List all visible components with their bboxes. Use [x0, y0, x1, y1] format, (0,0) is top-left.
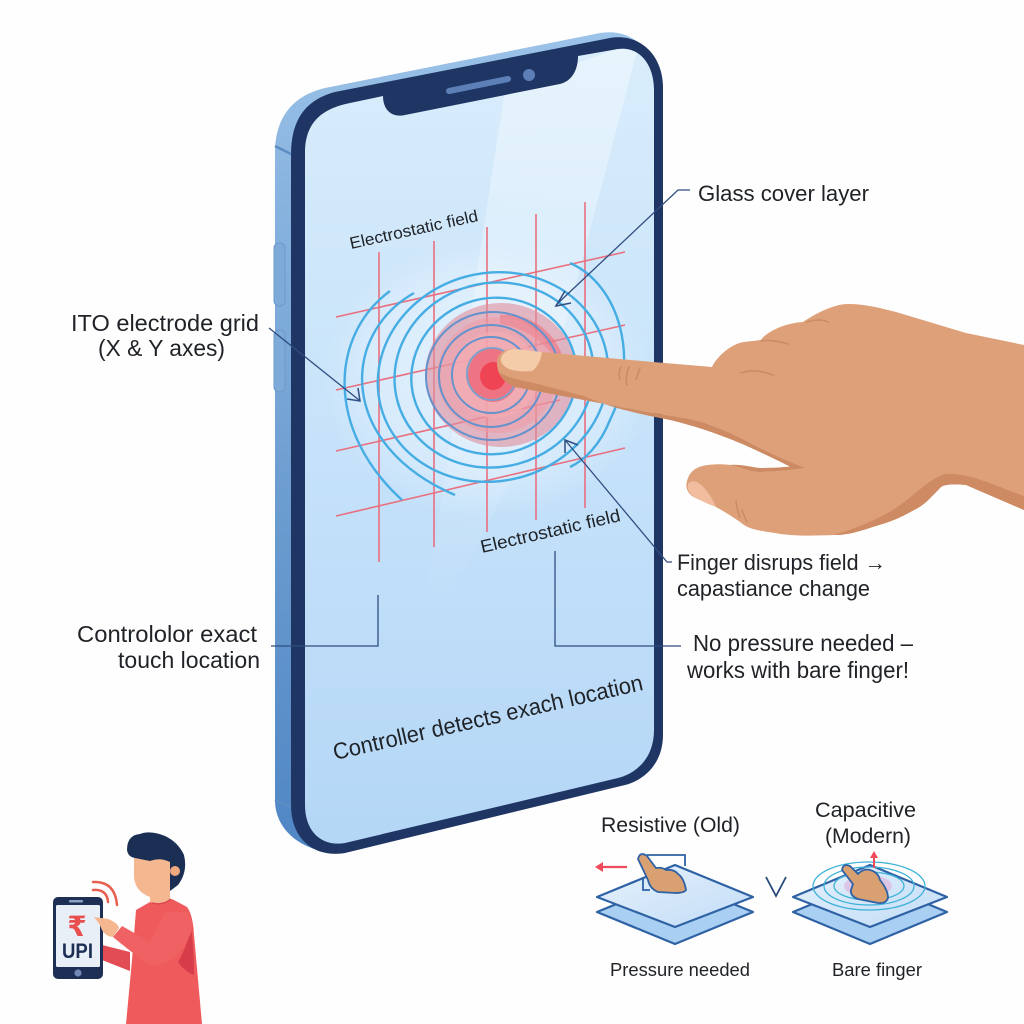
phone — [274, 32, 663, 860]
thumb crotch shadow — [730, 465, 806, 472]
comparison: resistive — [595, 814, 753, 980]
callout: finger disrupts field — [565, 440, 886, 601]
shirt shade — [178, 925, 194, 975]
callout: finger disrupts field: Finger disrups field → — [677, 550, 886, 575]
touch hotspot — [425, 303, 577, 447]
small phone — [53, 897, 103, 979]
collar — [152, 899, 171, 904]
resistive frame — [643, 855, 685, 890]
capacitive rings — [813, 862, 925, 910]
front arm — [113, 912, 192, 966]
caption: pressure needed: Pressure needed — [610, 959, 750, 980]
small phone: UPI — [62, 940, 93, 963]
neck and face — [134, 858, 170, 903]
callout: glass cover layer: Glass cover layer — [698, 181, 869, 206]
electrostatic field rings — [345, 247, 632, 507]
caption: bare finger: Bare finger — [832, 959, 922, 980]
callout: no pressure needed — [555, 551, 913, 683]
hand shape — [497, 304, 1024, 536]
ear — [170, 866, 180, 876]
finger underside shadow — [499, 372, 806, 469]
callout: controller exact touch location: touch location — [118, 647, 260, 673]
resistive layers — [597, 865, 753, 944]
wrist underside shadow — [834, 474, 1024, 535]
heading: resistive: Resistive (Old) — [601, 814, 740, 837]
heading: capacitive: Capacitive — [815, 799, 916, 822]
callout: glass cover layer — [556, 181, 869, 306]
pointing hand — [94, 917, 119, 937]
skin creases — [619, 320, 828, 522]
torso — [126, 899, 202, 1024]
ITO electrode grid — [336, 202, 625, 562]
phone screen — [300, 40, 660, 860]
callout: ITO electrode grid: ITO electrode grid — [71, 310, 259, 336]
callout: controller exact touch location: Contrololor exact — [77, 621, 258, 647]
callout: no pressure needed: No pressure needed – — [693, 630, 913, 656]
signal arcs — [93, 882, 117, 905]
hair — [127, 832, 185, 891]
label: electrostatic field bottom: Electrostatic field — [478, 505, 622, 557]
label: electrostatic field top: Electrostatic field — [348, 207, 480, 253]
callout: ITO electrode grid: (X & Y axes) — [98, 335, 225, 361]
callout: finger disrupts field: capastiance change — [677, 576, 870, 601]
finger nail — [501, 349, 542, 371]
callout: no pressure needed: works with bare finger! — [686, 657, 909, 683]
capacitive hand — [842, 865, 888, 903]
notch camera — [523, 69, 535, 81]
phone body side — [275, 32, 663, 853]
resistive press arrow — [595, 862, 627, 872]
label: controller detects location: Controller detects exach location — [330, 669, 645, 765]
side seams — [275, 146, 291, 807]
notch speaker — [449, 79, 508, 91]
resistive hand — [638, 854, 686, 893]
person paying with UPI — [53, 832, 202, 1024]
heading: modern: (Modern) — [825, 825, 911, 848]
callout: ITO electrode grid — [71, 310, 360, 401]
hand pointing at screen — [497, 304, 1024, 536]
phone bezel — [291, 37, 663, 854]
callout: controller exact touch location — [77, 595, 378, 673]
capacitive layers — [793, 865, 947, 944]
versus mark — [766, 877, 786, 896]
side button: volume down — [274, 330, 285, 392]
capacitive arrow — [870, 851, 878, 868]
side button: volume up — [274, 243, 285, 306]
small phone: ₹ — [67, 910, 87, 943]
back arm — [102, 945, 130, 971]
comparison: capacitive — [793, 799, 947, 980]
capacitive spot — [844, 875, 892, 897]
thumb nail — [688, 481, 716, 507]
